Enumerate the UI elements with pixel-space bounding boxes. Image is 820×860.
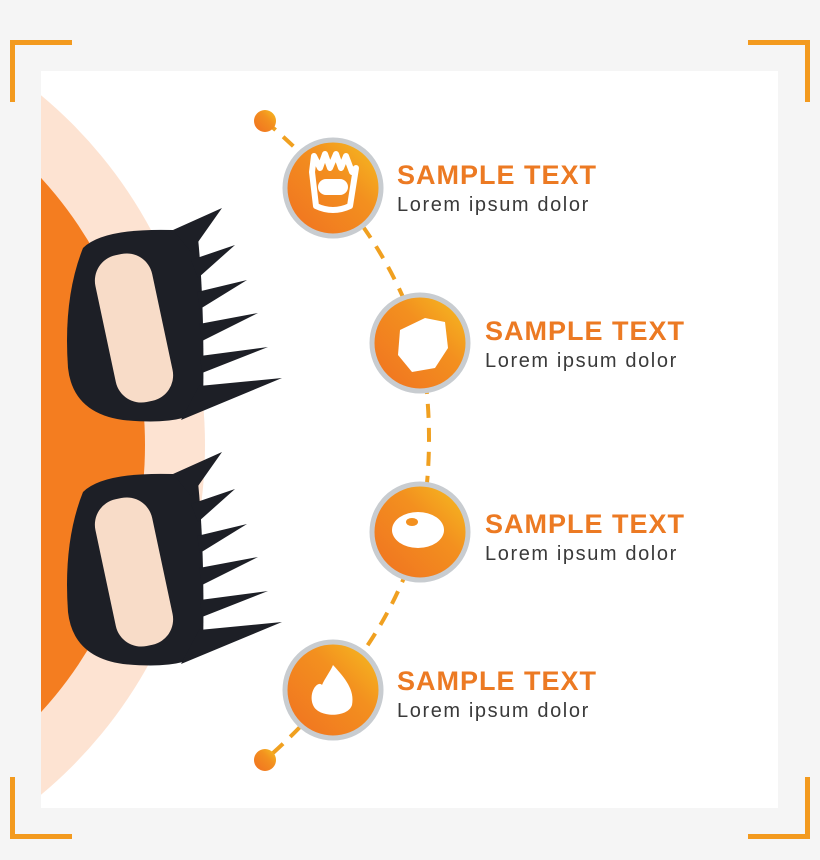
item 4 text [397,666,597,722]
item 2 text: SAMPLE TEXT [485,316,685,346]
icon: flame [312,665,353,715]
claw 1 [67,208,282,422]
item 2 text: Lorem ipsum dolor [485,350,678,372]
icon: fist [398,318,448,372]
item 2 text [485,316,685,372]
item 1 text: SAMPLE TEXT [397,160,597,190]
white panel [41,71,778,808]
background arcs [41,96,205,794]
icon: claw [312,154,356,210]
item 3 text [485,509,685,565]
end dots [254,110,276,132]
claw 2 [67,452,282,666]
dashed path [265,121,429,760]
item 4 text: Lorem ipsum dolor [397,700,590,722]
item 1 text [397,160,597,216]
item 1 text: Lorem ipsum dolor [397,194,590,216]
item 4 text: SAMPLE TEXT [397,666,597,696]
item 3 text: Lorem ipsum dolor [485,543,678,565]
icon: steak [392,512,444,548]
item 3 text: SAMPLE TEXT [485,509,685,539]
icon circles [285,140,468,738]
